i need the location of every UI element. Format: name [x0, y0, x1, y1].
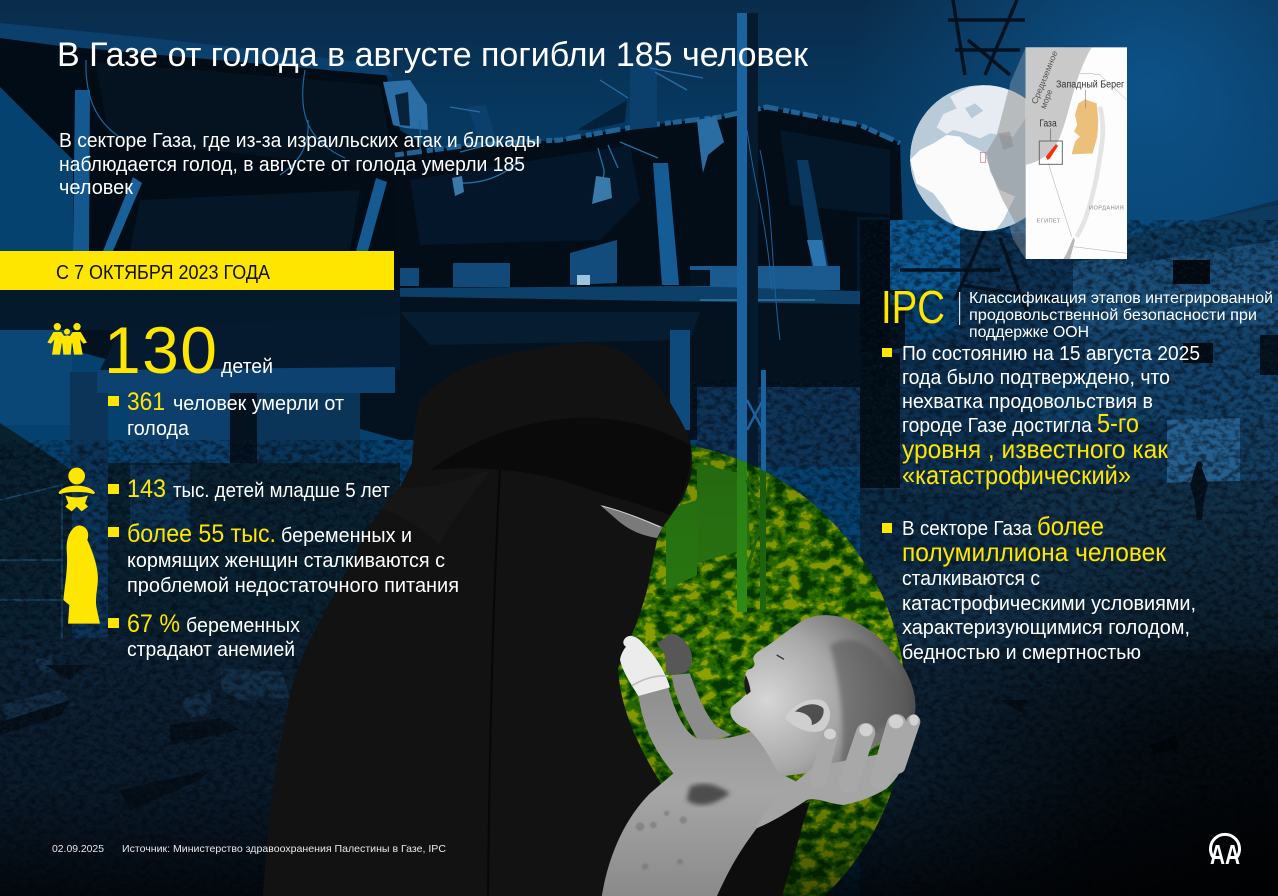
IPC point: half a million people: бедностью и смертностью	[902, 642, 1141, 664]
locator globe and map: ЕГИПЕТ	[1037, 219, 1061, 225]
left collapsed roof	[0, 38, 432, 290]
statistic: 130 children: 130	[104, 313, 217, 387]
statistic: 67 percent anemia: страдают анемией	[127, 639, 295, 661]
column stubs, debris and tarp on roof	[630, 63, 657, 130]
sleeve	[713, 802, 810, 896]
wires hanging from left roof	[86, 60, 420, 200]
icon: baby	[60, 468, 93, 511]
intro text: наблюдается голод, в августе от голода умерли 185	[59, 154, 525, 176]
statistic: 361 died of hunger: человек умерли от	[173, 393, 344, 415]
bandage	[620, 636, 670, 696]
intro text	[59, 130, 540, 199]
eye slit	[600, 505, 663, 538]
ground rubble	[0, 630, 400, 896]
yellow period banner	[0, 251, 394, 290]
area behind woman to the right	[670, 330, 690, 430]
statistic: 143 thousand children under 5: тыс. детей младше 5 лет	[173, 480, 390, 502]
locator globe and map: ИОРДАНИЯ	[1089, 206, 1124, 212]
person walking	[1190, 461, 1208, 520]
IPC heading: Классификация этапов интегрированной	[969, 290, 1273, 307]
utility pole	[737, 13, 747, 633]
statistic: 130 children: детей	[221, 356, 273, 378]
logo: Anadolu Agency: AA	[1210, 839, 1240, 870]
middle slab	[400, 286, 905, 312]
veiled woman silhouette	[263, 343, 807, 896]
tower girders	[900, 0, 1060, 320]
locator globe and map: море	[1038, 88, 1055, 110]
map panel	[1026, 47, 1127, 259]
IPC point: half a million people	[882, 511, 1196, 664]
IPC point: level 5 catastrophic: 5-го	[1097, 408, 1139, 438]
right: tower sky gap and buildings	[860, 220, 890, 360]
statistic: 55 thousand pregnant and nursing women: беременных и	[281, 525, 412, 547]
supporting hand	[757, 750, 904, 828]
IPC point: half a million people: более	[1037, 511, 1104, 541]
statistic: 55 thousand pregnant and nursing women: проблемой недостаточного питания	[127, 575, 459, 597]
Gaza strip	[1046, 144, 1058, 160]
IPC heading: продовольственной безопасности при	[969, 307, 1257, 324]
West Bank	[1072, 99, 1098, 154]
title: В Газе от голода в августе погибли 185 человек	[57, 36, 809, 74]
intro text: человек	[59, 177, 133, 199]
head	[730, 615, 916, 777]
building behind, under roof	[570, 240, 617, 285]
locator globe and map: Газа	[1039, 118, 1057, 129]
IPC heading	[881, 281, 1273, 341]
IPC point: half a million people: В секторе Газа	[902, 518, 1033, 540]
locator globe and map: Западный Берег	[1056, 80, 1125, 91]
statistic: 143 thousand children under 5: 143	[127, 475, 166, 503]
footer source line: 02.09.2025	[52, 843, 104, 855]
IPC point: level 5 catastrophic: «катастрофический»	[902, 460, 1131, 490]
IPC point: level 5 catastrophic	[882, 343, 1200, 490]
statistic: 67 percent anemia: беременных	[186, 615, 300, 637]
IPC point: half a million people: катастрофическими условиями,	[902, 593, 1196, 615]
IPC heading: IPC	[881, 281, 945, 333]
statistic: 67 percent anemia: 67 %	[127, 610, 180, 638]
statistic: 55 thousand pregnant and nursing women: кормящих женщин сталкиваются с	[127, 550, 445, 572]
IPC point: level 5 catastrophic: года было подтверждено, что	[902, 367, 1170, 389]
central roof	[395, 107, 905, 295]
statistic: 55 thousand pregnant and nursing women: более 55 тыс.	[127, 520, 276, 548]
footer source line: Источник: Министерство здравоохранения Палестины в Газе, IPC	[122, 843, 446, 855]
green circle with rubble photo	[618, 446, 904, 896]
IPC point: half a million people: сталкиваются с	[902, 568, 1040, 590]
statistic: 143 thousand children under 5	[108, 475, 390, 503]
IPC point: half a million people: характеризующимися голодом,	[902, 617, 1190, 639]
icon: family of children	[47, 323, 87, 355]
IPC point: level 5 catastrophic: городе Газе достигла	[902, 415, 1093, 437]
statistic: 67 percent anemia	[108, 610, 300, 661]
IPC heading: поддержке ООН	[969, 324, 1089, 341]
globe	[910, 85, 1026, 231]
icon: pregnant woman	[63, 525, 100, 624]
statistic: 55 thousand pregnant and nursing women	[108, 520, 459, 597]
IPC point: half a million people: полумиллиона человек	[902, 537, 1167, 567]
locator globe and map: Средиземное	[1029, 49, 1060, 105]
statistic: 361 died of hunger	[108, 388, 344, 440]
ear	[785, 699, 830, 732]
IPC point: level 5 catastrophic: нехватка продовольствия в	[902, 391, 1153, 413]
left middle wall and beam	[0, 290, 400, 330]
yellow period banner: С 7 ОКТЯБРЯ 2023 ГОДА	[56, 262, 271, 284]
logo: Anadolu Agency	[1210, 834, 1240, 870]
texture	[0, 220, 1278, 893]
statistic: 130 children	[104, 313, 273, 387]
body and near arm	[602, 687, 800, 896]
statistic: 361 died of hunger: 361	[127, 388, 165, 416]
locator globe and map	[910, 47, 1127, 259]
far arm	[672, 673, 732, 743]
IPC point: level 5 catastrophic: уровня , известного как	[902, 434, 1169, 464]
statistic: 361 died of hunger: голода	[127, 418, 190, 440]
intro text: В секторе Газа, где из-за израильских атак и блокады	[59, 130, 540, 152]
baby held in a hand	[602, 615, 919, 896]
IPC point: level 5 catastrophic: По состоянию на 15 августа 2025	[902, 343, 1200, 365]
